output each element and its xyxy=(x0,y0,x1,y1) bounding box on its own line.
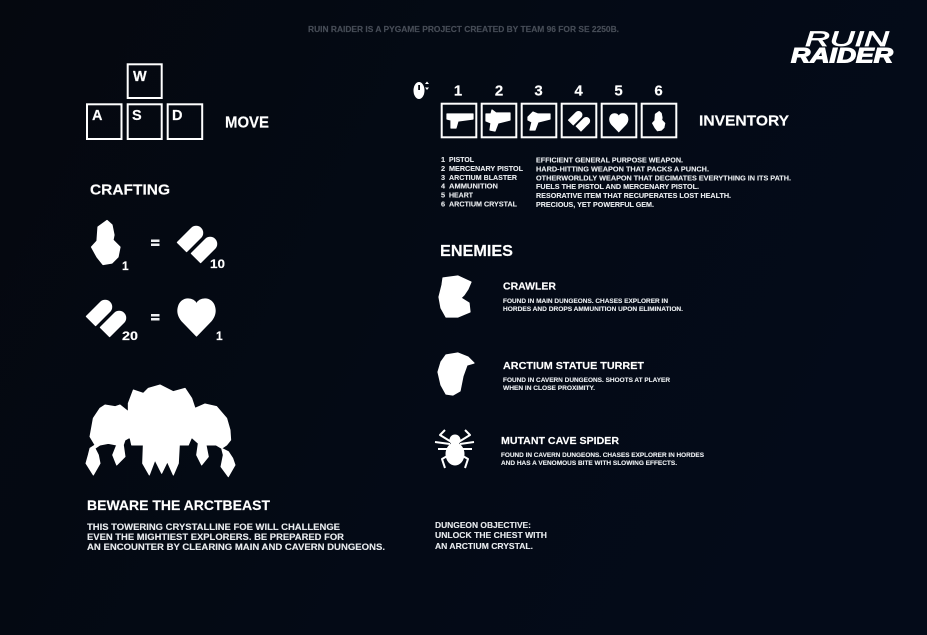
crafting row: crystal to ammunition: 10 xyxy=(210,257,225,271)
movement keys: D xyxy=(172,108,182,124)
inventory item names: ARCTIUM CRYSTAL xyxy=(449,200,518,208)
arctbeast description: THIS TOWERING CRYSTALLINE FOE WILL CHALLENGE xyxy=(87,522,340,532)
logo: RAIDER xyxy=(791,44,894,68)
inventory item descriptions xyxy=(536,156,791,209)
inventory slot numbers xyxy=(454,82,663,100)
inventory slot numbers: 2 xyxy=(495,82,503,100)
enemies heading: ENEMIES xyxy=(440,243,513,260)
header credit line: RUIN RAIDER IS A PYGAME PROJECT CREATED BY TEAM 96 FOR SE 2250B. xyxy=(308,25,619,34)
inventory item descriptions: EFFICIENT GENERAL PURPOSE WEAPON. xyxy=(536,156,683,164)
dungeon objective xyxy=(435,520,547,551)
inventory item names: PISTOL xyxy=(449,155,475,164)
crafting row: ammunition to heart: 20 xyxy=(122,329,138,343)
movement keys: A xyxy=(92,108,103,124)
icon: pistol xyxy=(447,114,473,128)
dungeon objective: UNLOCK THE CHEST WITH xyxy=(435,530,547,540)
inventory slot numbers: 5 xyxy=(614,82,623,100)
inventory slots xyxy=(442,104,676,137)
movement keys: W xyxy=(133,69,147,85)
inventory item names: 4 xyxy=(441,182,446,190)
inventory item names: HEART xyxy=(449,190,474,200)
icon: mercenary pistol xyxy=(486,110,510,131)
arctium statue turret text xyxy=(503,360,670,392)
dungeon objective: AN ARCTIUM CRYSTAL. xyxy=(435,541,533,551)
inventory item descriptions: RESORATIVE ITEM THAT RECUPERATES LOST HEALTH. xyxy=(536,191,731,200)
inventory item names: 1 xyxy=(441,155,445,164)
inventory item names xyxy=(441,155,524,208)
dungeon objective: DUNGEON OBJECTIVE: xyxy=(435,520,531,530)
logo xyxy=(791,28,894,68)
arctium statue turret text: WHEN IN CLOSE PROXIMITY. xyxy=(503,385,595,392)
crafting row: ammunition to heart: 1 xyxy=(216,329,223,343)
movement keys xyxy=(87,64,202,139)
inventory item descriptions: HARD-HITTING WEAPON THAT PACKS A PUNCH. xyxy=(536,164,709,174)
inventory item descriptions: FUELS THE PISTOL AND MERCENARY PISTOL. xyxy=(536,182,699,191)
crawler text: HORDES AND DROPS AMMUNITION UPON ELIMINATION. xyxy=(503,306,683,313)
arctium statue turret text: ARCTIUM STATUE TURRET xyxy=(503,360,645,372)
crafting row: ammunition to heart xyxy=(86,298,223,343)
inventory item names: 2 xyxy=(441,164,445,173)
crafting row: crystal to ammunition: 1 xyxy=(122,259,129,273)
icon: mutant cave spider xyxy=(435,430,474,468)
icon: ammunition xyxy=(568,110,591,131)
arctbeast heading: BEWARE THE ARCTBEAST xyxy=(87,497,270,513)
move label: MOVE xyxy=(225,114,269,132)
inventory item names: AMMUNITION xyxy=(449,182,498,190)
icon: heart xyxy=(609,114,628,132)
crawler text: FOUND IN MAIN DUNGEONS. CHASES EXPLORER IN xyxy=(503,298,668,305)
inventory slot numbers: 1 xyxy=(454,82,462,100)
icon: mouse scroll xyxy=(414,82,429,99)
crafting row: crystal to ammunition xyxy=(92,220,225,273)
mutant cave spider text xyxy=(501,435,705,467)
mutant cave spider text: MUTANT CAVE SPIDER xyxy=(501,435,619,447)
arctium statue turret text: FOUND IN CAVERN DUNGEONS. SHOOTS AT PLAYER xyxy=(503,377,670,384)
mutant cave spider text: FOUND IN CAVERN DUNGEONS. CHASES EXPLORER IN HORDES xyxy=(501,452,705,459)
inventory slot numbers: 3 xyxy=(534,82,543,100)
arctbeast description xyxy=(87,522,385,552)
icon: arctium statue turret xyxy=(438,353,474,395)
icon: crawler xyxy=(439,276,471,317)
movement keys: S xyxy=(132,108,142,124)
crafting heading: CRAFTING xyxy=(90,182,170,198)
arctbeast silhouette xyxy=(86,385,235,477)
inventory slot numbers: 6 xyxy=(654,82,663,100)
crawler text xyxy=(503,280,683,313)
inventory label: INVENTORY xyxy=(699,112,789,130)
inventory item names: ARCTIUM BLASTER xyxy=(449,173,518,182)
inventory item names: MERCENARY PISTOL xyxy=(449,164,524,173)
inventory item descriptions: PRECIOUS, YET POWERFUL GEM. xyxy=(536,200,654,209)
inventory item names: 3 xyxy=(441,173,445,182)
icon: arctium crystal xyxy=(652,111,665,131)
inventory item descriptions: OTHERWORLDLY WEAPON THAT DECIMATES EVERYTHING IN ITS PATH. xyxy=(536,174,791,182)
mutant cave spider text: AND HAS A VENOMOUS BITE WITH SLOWING EFFECTS. xyxy=(501,460,677,467)
icon: arctium blaster xyxy=(528,112,550,130)
inventory item names: 5 xyxy=(441,190,445,200)
inventory item names: 6 xyxy=(441,200,445,208)
inventory slot numbers: 4 xyxy=(574,82,583,100)
crawler text: CRAWLER xyxy=(503,280,556,292)
arctbeast description: EVEN THE MIGHTIEST EXPLORERS. BE PREPARED FOR xyxy=(87,532,344,542)
arctbeast description: AN ENCOUNTER BY CLEARING MAIN AND CAVERN DUNGEONS. xyxy=(87,542,385,552)
logo: RUIN xyxy=(805,28,890,51)
